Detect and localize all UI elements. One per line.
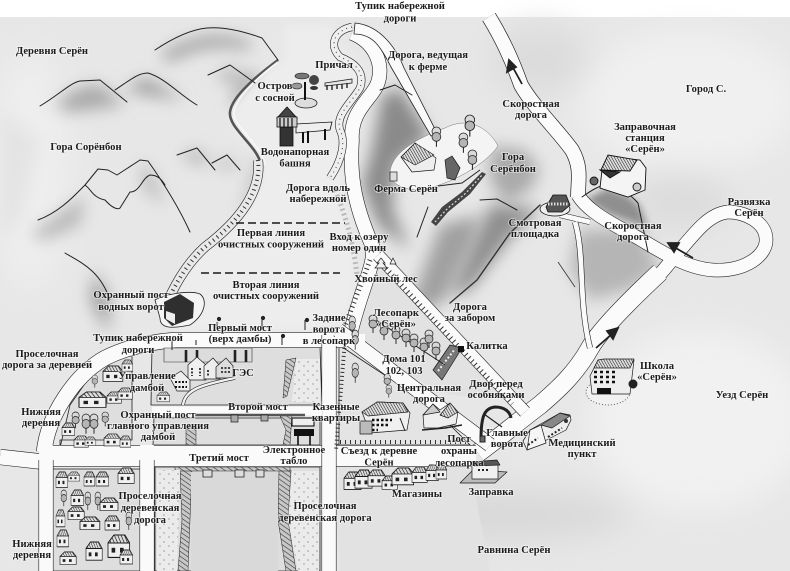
label: village Seryon: Деревня Серён: [16, 46, 88, 57]
forest park ground: [345, 255, 500, 398]
label: highway east: Скоростная: [604, 221, 662, 232]
label: dam management: Управление: [118, 371, 176, 382]
label: interchange: Развязка: [728, 197, 770, 208]
label: village dirt road: деревенская: [121, 503, 180, 514]
label: village dirt road: Проселочная: [118, 491, 182, 502]
shoreline left and dotted dike: [165, 60, 278, 308]
label: viewing platform: площадка: [511, 229, 560, 240]
label: dirt road right: деревенская дорога: [278, 513, 372, 524]
conifer trees: [375, 258, 396, 268]
label: embankment road: Дорога вдоль: [286, 183, 350, 194]
label: medical point: пункт: [568, 449, 597, 460]
label: filling station Seryon: станция: [625, 133, 665, 144]
label: exit to village: Съезд к деревне: [341, 446, 417, 457]
label: water gate guard post: Охранный пост: [93, 290, 169, 301]
label: embankment road: набережной: [289, 194, 347, 205]
label: houses 101 to 103: Дома 101: [382, 354, 426, 365]
label: back gate: ворота: [313, 324, 346, 336]
label: lower village: деревня: [13, 550, 51, 561]
medical point: [523, 413, 571, 450]
forest park trees: [369, 315, 445, 365]
label: medical point: Медицинский: [548, 438, 616, 449]
label: forest park guard post: охраны: [441, 446, 477, 457]
farm buildings and trees: [390, 115, 477, 181]
upper village: [62, 360, 133, 447]
label: main dam guard post: дамбой: [141, 432, 175, 443]
label: water tower: башня: [279, 158, 311, 170]
label: electronic board: Электронное: [263, 445, 325, 456]
viewing platform: [540, 195, 570, 216]
label: hydro station: ГЭС: [232, 368, 254, 379]
label: conifer forest: Хвойный лес: [354, 274, 418, 285]
hydroelectric station: [157, 348, 252, 405]
label: dam management: дамбой: [130, 383, 164, 394]
bridge piers and lake panel: [191, 415, 305, 571]
label: second bridge: Второй мост: [228, 402, 289, 413]
dotted embankment right: [330, 27, 361, 178]
lower village: [56, 468, 134, 565]
label: filling station Seryon: «Серён»: [625, 144, 665, 155]
label: barracks: квартиры: [312, 413, 360, 424]
label: highway north: дорога: [515, 110, 548, 121]
label: houses 101 to 103: 102, 103: [385, 366, 423, 377]
highway arrows: [507, 60, 693, 348]
water tower: [277, 107, 332, 146]
label: dirt road right: Проселочная: [293, 501, 357, 512]
main gate arch: [480, 407, 511, 442]
label: first treatment line: Первая линия: [237, 228, 305, 239]
pier: [325, 79, 352, 90]
label: third bridge: Третий мост: [189, 453, 250, 464]
label: main dam guard post: Охранный пост: [120, 410, 196, 421]
label: dirt road behind village: дорога за деревней: [2, 360, 92, 371]
label: lower village: Нижняя: [12, 539, 52, 550]
label: interchange: Серён: [734, 208, 764, 219]
side trees along central area: [349, 316, 392, 398]
label: top dead end: Тупик набережной: [355, 1, 445, 12]
label: lower village upper: деревня: [22, 418, 60, 429]
label: central road: Центральная: [397, 383, 461, 394]
tree row on ridge: [431, 170, 486, 226]
label: mount Serenbon: Серёнбон: [490, 164, 536, 175]
road: branch to viewing platform and thin road: [558, 215, 590, 348]
road: farm access: [354, 23, 437, 136]
label: central road: дорога: [413, 394, 446, 405]
label: filling station Seryon: Заправочная: [614, 122, 676, 133]
label: second treatment line: Вторая линия: [233, 280, 299, 291]
label: back gate: Задние: [312, 313, 346, 324]
label: dam road dead end: дороги: [122, 345, 154, 356]
school: [586, 359, 638, 405]
label: mansions yard: особняками: [468, 390, 524, 401]
label: lake entrance: номер один: [332, 243, 386, 254]
label: water tower: Водонапорная: [261, 147, 329, 158]
central hill wash: [362, 88, 660, 320]
label: plain: Равнина Серён: [478, 545, 550, 556]
label: mount Serenbon: Гора: [502, 152, 524, 163]
label: exit to village: Серён: [364, 458, 394, 468]
label: farm: Ферма Серён: [374, 184, 438, 195]
label: school: «Серён»: [637, 372, 677, 383]
label: forest park: «Серён»: [376, 319, 416, 330]
label: barracks: Казенные: [313, 402, 359, 413]
lake: [170, 25, 365, 330]
label: wicket gate: Калитка: [466, 341, 508, 352]
label: pine island: Остров: [258, 81, 292, 92]
fence road behind forest park: [336, 255, 525, 450]
mountain shading washes: [0, 36, 265, 335]
houses 101 102 103 row: [433, 345, 464, 380]
road: embankment white strip: [350, 33, 380, 335]
label: farm road: Дорога, ведущая: [388, 50, 468, 61]
label: forest park guard post: лесопарка: [434, 458, 484, 469]
label: mount Sorenbon: Гора Сорёнбон: [50, 142, 122, 153]
label: highway north: Скоростная: [502, 99, 560, 110]
label: main gate: ворота: [491, 439, 524, 450]
electronic board: [292, 418, 314, 445]
filling station building: [590, 155, 646, 197]
label: dam road dead end: Тупик набережной: [93, 333, 183, 344]
label: back gate: в лесопарк: [303, 336, 356, 347]
label: first bridge: (верх дамбы): [209, 334, 272, 345]
dashed treatment lines: [201, 223, 345, 273]
pine island: [292, 73, 319, 108]
label: school: Школа: [640, 361, 674, 372]
mountain ridge lines: [38, 28, 648, 303]
dam lampposts: [172, 316, 309, 350]
block grounds: [52, 345, 490, 571]
road: highway with interchange loop: [478, 17, 766, 453]
label: top dead end: дороги: [384, 14, 416, 24]
label: water gate guard post: водных ворот: [98, 302, 165, 313]
shops cluster: [344, 465, 447, 490]
label: county: Уезд Серён: [716, 390, 768, 401]
dam road and connecting roads: [0, 330, 490, 571]
label: first bridge: Первый мост: [208, 323, 272, 334]
label: city: Город С.: [686, 84, 726, 95]
label: forest park guard post: Пост: [447, 434, 471, 445]
label: gas station: Заправка: [468, 487, 514, 498]
dotted embankment lower right: [335, 190, 357, 275]
label: pier: Причал: [315, 60, 353, 71]
label: electronic board: табло: [281, 456, 307, 467]
label: first treatment line: очистных сооружений: [218, 240, 324, 250]
gas station forecourt: [460, 460, 507, 483]
barracks building: [360, 402, 410, 434]
label: main dam guard post: главного управления: [107, 421, 209, 432]
mansion houses: [422, 403, 462, 430]
label: mansions yard: Двор перед: [469, 379, 523, 390]
label: lower village upper: Нижняя: [21, 407, 61, 418]
label: viewing platform: Смотровая: [509, 218, 561, 229]
label: dirt road behind village: Проселочная: [15, 349, 79, 360]
label: second treatment line: очистных сооружений: [213, 291, 319, 302]
label: road behind fence: за забором: [445, 313, 495, 324]
label: farm road: к ферме: [409, 62, 448, 73]
label: shops: Магазины: [392, 489, 442, 500]
label: village dirt road: дорога: [134, 515, 167, 526]
guard post of water gate: [155, 292, 204, 327]
farm clearing: [390, 123, 498, 190]
label: main gate: Главные: [486, 428, 528, 439]
label: highway east: дорога: [617, 232, 650, 243]
label: road behind fence: Дорога: [453, 302, 487, 313]
label: lake entrance: Вход к озеру: [330, 232, 388, 243]
label: pine island: с сосной: [255, 93, 295, 104]
label: forest park: Лесопарк: [373, 308, 419, 319]
dam dotted ground: [157, 359, 320, 571]
dam hatched strips: [175, 358, 296, 571]
